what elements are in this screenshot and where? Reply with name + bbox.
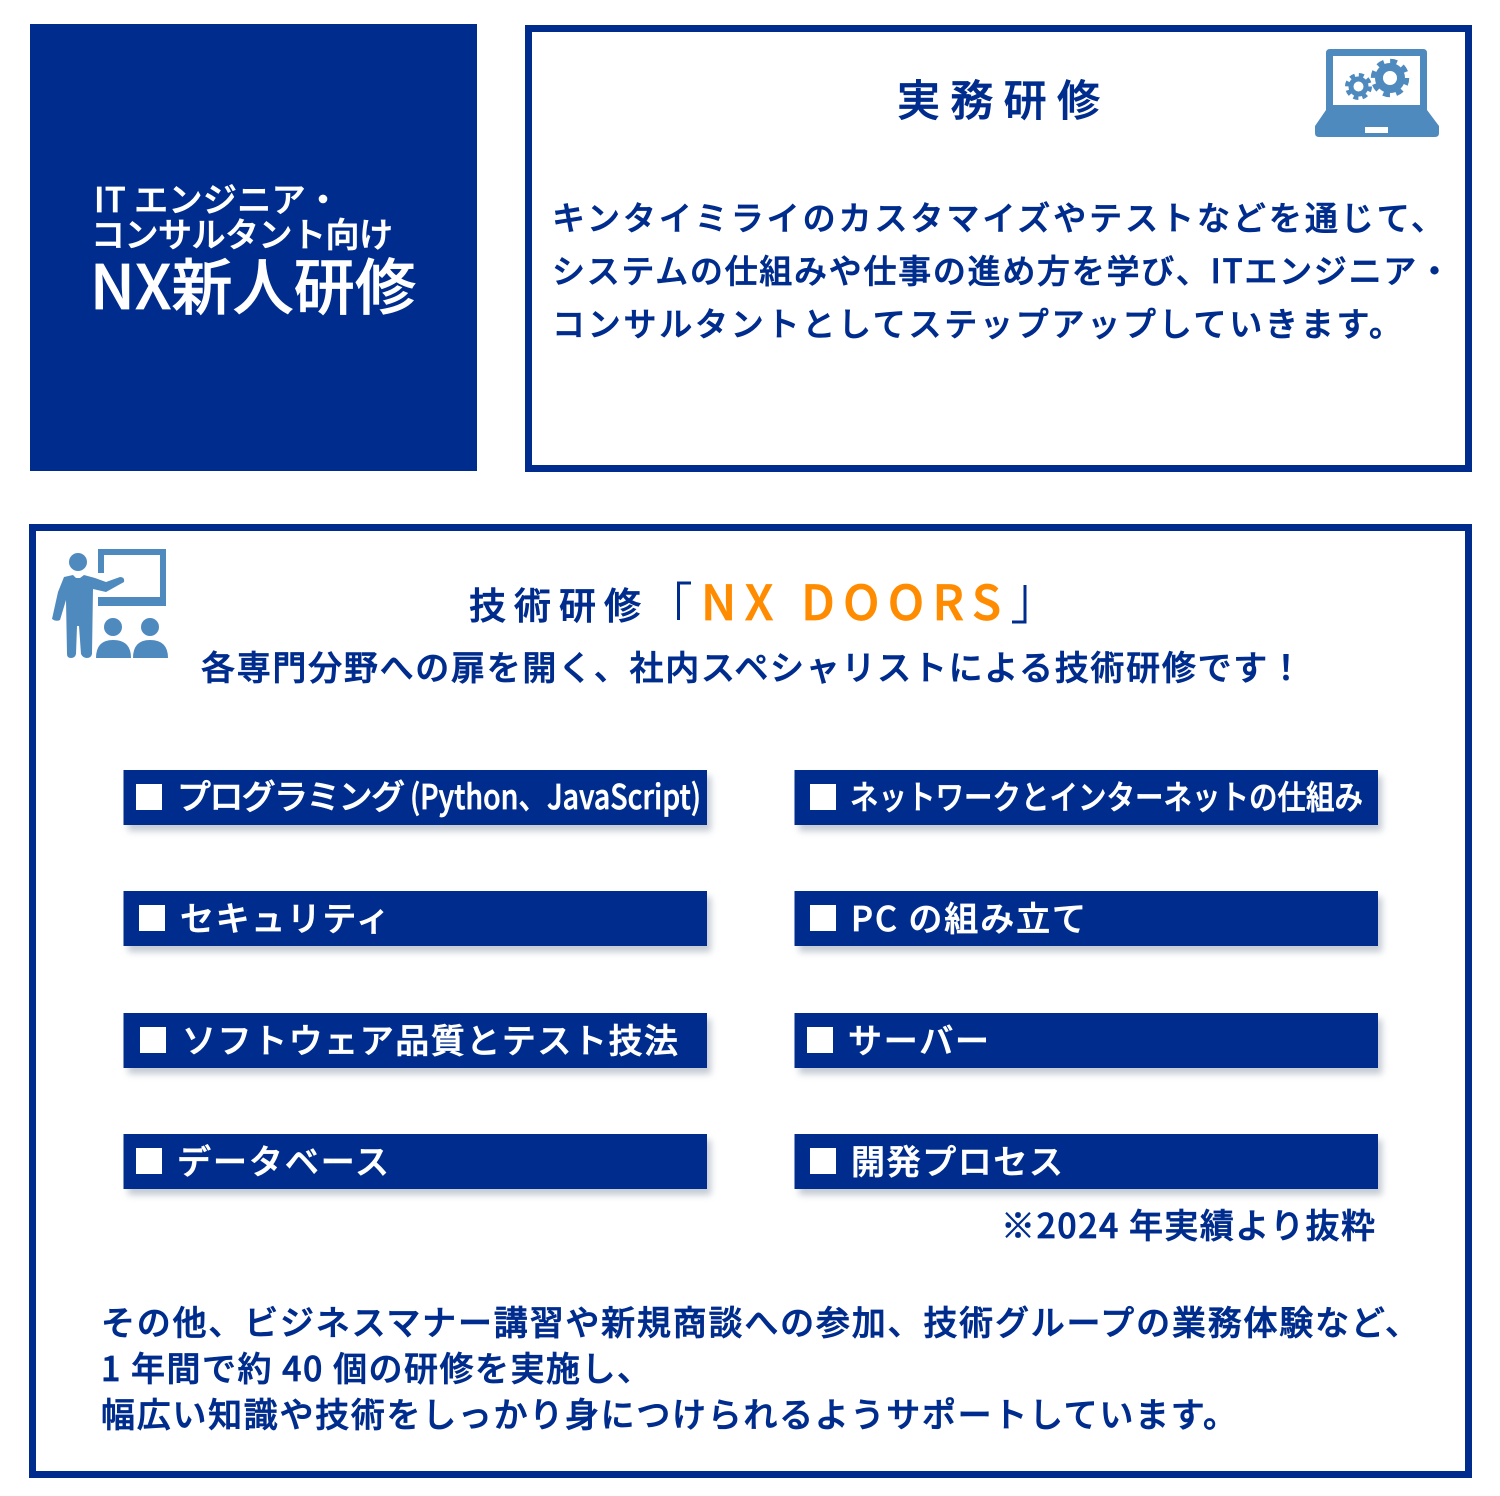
- icon: presenter and audience: [52, 549, 168, 658]
- bar: database: データベース: [177, 1135, 389, 1184]
- bracket open: [678, 583, 691, 620]
- heading: NX DOORS: NX DOORS: [701, 564, 1001, 634]
- panel: practical training: [528, 28, 1468, 468]
- text block: practical training description: [552, 192, 1451, 346]
- bar: server: [794, 1013, 1382, 1074]
- panel: title block: [30, 24, 477, 471]
- text block: practical training description: システムの仕組みや仕事の進め方を学び、ITエンジニア・: [552, 245, 1451, 293]
- text block: closing description: その他、ビジネスマナー講習や新規商談への参加、技術グループの業務体験など、: [101, 1296, 1419, 1345]
- bar: database: [124, 1134, 711, 1195]
- text block: practical training description: コンサルタントとしてステップアップしていきます。: [552, 298, 1402, 346]
- bar: PC assembly: PC の組み立て: [851, 892, 1086, 941]
- title: NX新人研修: [90, 238, 416, 327]
- bracket close: [1012, 585, 1025, 622]
- subtitle: 各専門分野への扉を開く、社内スペシャリストによる技術研修です！: [201, 641, 1303, 690]
- footnote: ※2024 年実績より抜粋: [1001, 1199, 1375, 1248]
- bar: software quality: ソフトウェア品質とテスト技法: [182, 1014, 678, 1063]
- heading: technical training: 技術研修: [469, 576, 641, 630]
- bar: network: ネットワークとインターネットの仕組み: [850, 771, 1363, 819]
- panel: technical training: [32, 528, 1468, 1474]
- bar: PC assembly: [794, 891, 1382, 952]
- bar: development process: [794, 1134, 1382, 1195]
- bar: development process: 開発プロセス: [851, 1135, 1063, 1184]
- heading: audience line 1: IT エンジニア・: [94, 173, 340, 222]
- bar: server: サーバー: [848, 1014, 989, 1063]
- heading: audience line 2: コンサルタント向け: [91, 208, 393, 257]
- heading: practical training: 実務研修: [897, 67, 1100, 129]
- text block: closing description: 1 年間で約 40 個の研修を実施し、: [101, 1342, 651, 1391]
- bar: programming: プログラミング: [177, 770, 405, 819]
- bar: security: セキュリティ: [180, 892, 390, 941]
- icon: laptop with gears: [1315, 49, 1439, 137]
- text block: practical training description: キンタイミライのカスタマイズやテストなどを通じて、: [552, 192, 1444, 240]
- bar: programming: [124, 770, 711, 831]
- text block: closing description: [101, 1296, 1419, 1437]
- bar: software quality: [124, 1013, 711, 1074]
- text block: closing description: 幅広い知識や技術をしっかり身につけられるようサポートしています。: [101, 1388, 1237, 1437]
- bar: security: [124, 891, 711, 952]
- bar: network: [794, 770, 1382, 831]
- bar: programming: (Python、JavaScript): [410, 770, 701, 819]
